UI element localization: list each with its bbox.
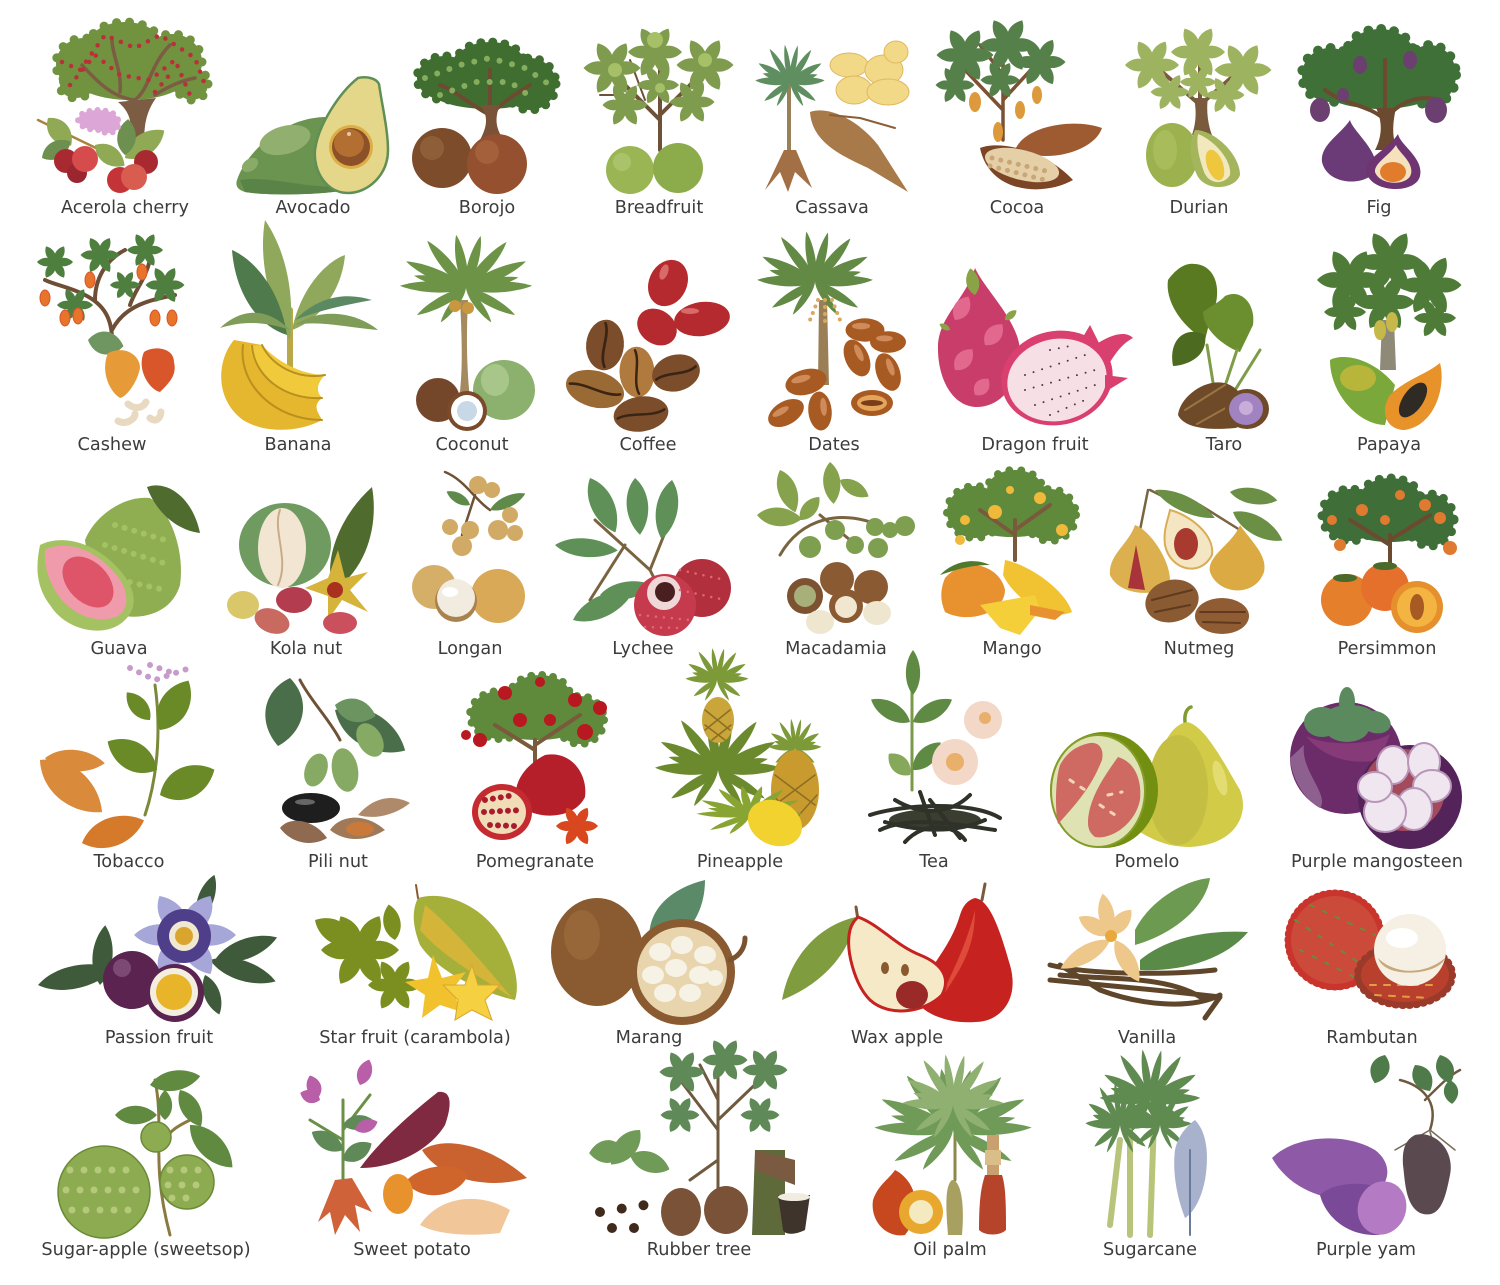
icon: guava — [37, 485, 200, 631]
item: Rubber tree — [588, 1038, 810, 1260]
icon: durian tree and fruit — [1125, 25, 1272, 187]
icon: purple yam plant and tubers — [1272, 1052, 1460, 1242]
label: Rambutan — [1326, 1028, 1418, 1048]
icon: pomegranate tree and fruit — [461, 675, 607, 847]
icon: pineapple plant and fruit — [655, 648, 822, 855]
item: Passion fruit — [36, 872, 280, 1048]
icon: cocoa tree and pods — [936, 17, 1102, 189]
icon: rubber tree, tapping cup, seeds — [588, 1038, 810, 1236]
item: Oil palm — [873, 1054, 1032, 1260]
icon: lychee branch and fruit — [554, 473, 731, 636]
item: Pomegranate — [461, 675, 607, 872]
icon: banana plant and fruit — [220, 220, 378, 430]
icon: oil palm, fruit and bottle — [873, 1054, 1032, 1235]
label: Breadfruit — [615, 198, 703, 218]
label: Fig — [1366, 198, 1392, 218]
label: Vanilla — [1118, 1028, 1176, 1048]
item: Purple mangosteen — [1290, 687, 1463, 872]
item: Borojo — [412, 42, 556, 218]
icon: acerola tree and cherries — [38, 22, 208, 193]
icon: persimmon tree and fruit — [1321, 478, 1457, 633]
item: Cashew — [37, 232, 184, 455]
item: Macadamia — [756, 461, 915, 659]
label: Sugarcane — [1103, 1240, 1197, 1260]
icon: dragon fruit — [938, 267, 1133, 436]
label: Tea — [918, 852, 949, 872]
item: Sugar-apple (sweetsop) — [41, 1066, 251, 1260]
label: Rubber tree — [647, 1240, 751, 1260]
icon: tobacco plant and dry leaves — [29, 665, 221, 856]
label: Sugar-apple (sweetsop) — [41, 1240, 251, 1260]
item: Dates — [757, 231, 906, 455]
label: Cassava — [795, 198, 869, 218]
label: Tobacco — [93, 852, 164, 872]
item: Taro — [1168, 264, 1269, 455]
item: Longan — [412, 472, 528, 659]
label: Pomelo — [1115, 852, 1179, 872]
icon: coconut palm and fruit — [400, 234, 535, 431]
label: Coffee — [619, 435, 677, 455]
label: Passion fruit — [105, 1028, 213, 1048]
label: Papaya — [1357, 435, 1421, 455]
item: Lychee — [554, 473, 731, 659]
icon: sugar-apple — [58, 1066, 241, 1238]
item: Cassava — [755, 41, 909, 218]
item: Pomelo — [1050, 707, 1243, 872]
item: Sweet potato — [298, 1057, 527, 1260]
icon: breadfruit tree and fruit — [584, 25, 734, 194]
icon: coffee cherries and beans — [562, 253, 732, 435]
icon: sugarcane — [1085, 1049, 1207, 1235]
item: Vanilla — [1050, 878, 1248, 1048]
item: Tobacco — [29, 665, 221, 872]
item: Avocado — [236, 77, 388, 218]
icon: papaya tree and fruit — [1317, 229, 1462, 430]
label: Avocado — [276, 198, 350, 218]
item: Purple yam — [1272, 1052, 1460, 1260]
item: Pili nut — [260, 675, 414, 872]
icon: sweet potato plant and roots — [298, 1057, 527, 1235]
item: Breadfruit — [584, 25, 734, 218]
icon: purple mangosteen — [1290, 687, 1462, 849]
icon: cashew tree and nuts — [37, 232, 184, 422]
item: Coconut — [400, 234, 535, 455]
icon: star fruit — [309, 885, 517, 1020]
label: Lychee — [612, 639, 674, 659]
icon: wax apple — [782, 884, 1013, 1022]
label: Dragon fruit — [981, 435, 1089, 455]
label: Borojo — [459, 198, 515, 218]
icon: fig tree and fruit — [1302, 29, 1456, 189]
item: Pineapple — [655, 648, 822, 872]
icon: passion fruit flower and fruit — [36, 872, 280, 1022]
label: Oil palm — [913, 1240, 987, 1260]
item: Persimmon — [1321, 478, 1457, 659]
item: Tea — [867, 650, 1002, 872]
label: Wax apple — [851, 1028, 943, 1048]
label: Coconut — [435, 435, 509, 455]
label: Pili nut — [308, 852, 368, 872]
label: Nutmeg — [1164, 639, 1234, 659]
label: Macadamia — [785, 639, 887, 659]
item: Nutmeg — [1110, 483, 1287, 659]
label: Dates — [808, 435, 860, 455]
icon: avocado — [236, 77, 388, 194]
item: Wax apple — [782, 884, 1013, 1048]
item: Dragon fruit — [938, 267, 1133, 455]
icon: vanilla pods and flower — [1050, 878, 1248, 1018]
label: Longan — [438, 639, 502, 659]
icon: tea plant, flowers and leaves — [867, 650, 1002, 842]
label: Guava — [90, 639, 148, 659]
icon: macadamia branch and nuts — [756, 461, 915, 634]
label: Banana — [264, 435, 332, 455]
label: Durian — [1169, 198, 1229, 218]
item: Kola nut — [227, 487, 374, 659]
item: Fig — [1302, 29, 1456, 218]
icon: pili nut leaves and nuts — [260, 675, 414, 843]
icon: pomelo — [1050, 707, 1243, 848]
item: Marang — [551, 880, 745, 1048]
label: Pomegranate — [476, 852, 594, 872]
icon: taro plant and root — [1168, 264, 1269, 429]
label: Cocoa — [990, 198, 1044, 218]
item: Guava — [37, 485, 200, 659]
label: Purple yam — [1316, 1240, 1416, 1260]
icon: mango tree and fruit — [940, 470, 1076, 635]
item: Coffee — [562, 253, 732, 455]
icon: marang fruit — [551, 880, 745, 1025]
label: Taro — [1205, 435, 1242, 455]
item: Star fruit (carambola) — [309, 885, 517, 1048]
item: Papaya — [1317, 229, 1462, 455]
icon: borojo tree and fruit — [412, 42, 556, 194]
label: Acerola cherry — [61, 198, 189, 218]
item: Mango — [940, 470, 1076, 659]
icon: kola nut pod and flower — [227, 487, 374, 638]
icon: cassava plant and roots — [755, 41, 909, 192]
icon: nutmeg fruit and seeds — [1110, 483, 1287, 634]
item: Acerola cherry — [38, 22, 208, 218]
label: Sweet potato — [353, 1240, 471, 1260]
label: Persimmon — [1338, 639, 1436, 659]
item: Rambutan — [1289, 894, 1452, 1048]
item: Banana — [220, 220, 378, 455]
label: Cashew — [78, 435, 146, 455]
icon: longan branch and fruit — [412, 472, 528, 623]
label: Purple mangosteen — [1291, 852, 1463, 872]
icon: date palm and fruit — [757, 231, 906, 433]
label: Star fruit (carambola) — [319, 1028, 511, 1048]
label: Marang — [616, 1028, 682, 1048]
item: Sugarcane — [1085, 1049, 1207, 1260]
item: Durian — [1125, 25, 1272, 218]
label: Pineapple — [697, 852, 783, 872]
label: Kola nut — [270, 639, 342, 659]
label: Mango — [982, 639, 1042, 659]
icon: rambutan — [1289, 894, 1452, 1005]
item: Cocoa — [936, 17, 1102, 218]
